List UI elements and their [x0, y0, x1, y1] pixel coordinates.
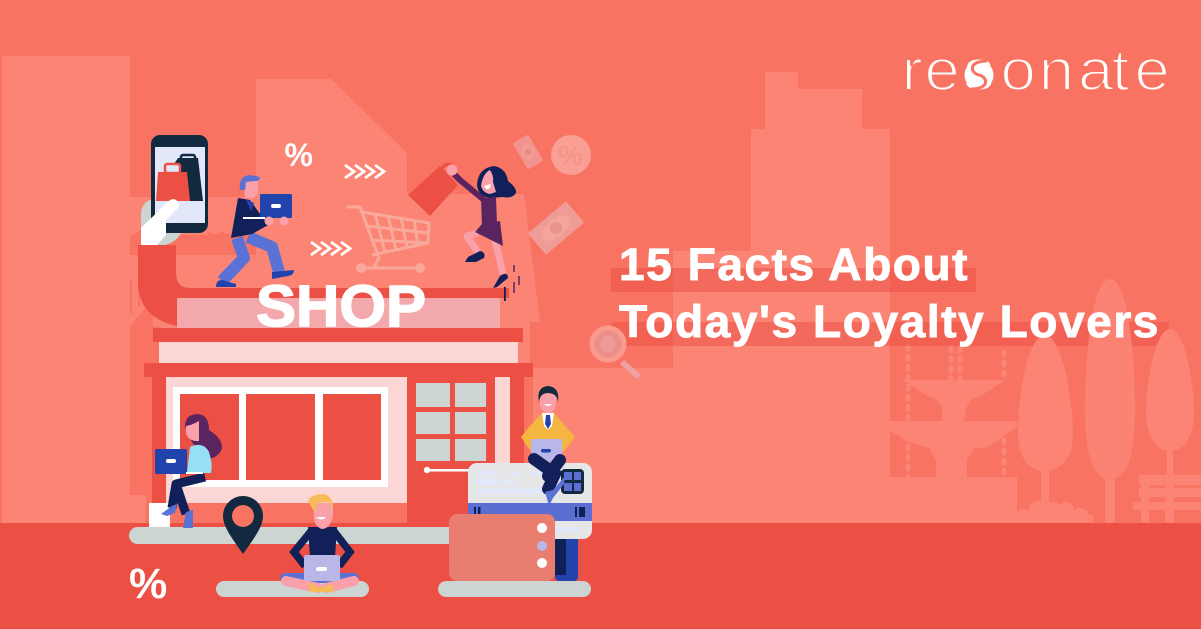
hair: [308, 494, 333, 513]
motion line: [504, 287, 506, 301]
icon: shopping cart: [347, 207, 429, 272]
sign text: SHOP: SHOP: [256, 274, 426, 339]
ground pills: [129, 527, 591, 597]
laptop: [531, 439, 562, 462]
shop: upper roof: [177, 288, 509, 298]
legs: [286, 581, 354, 588]
icon: location pin: [223, 496, 263, 554]
legs: [534, 459, 560, 489]
shop: door strip: [495, 377, 510, 472]
icon: phone with shopping bags: [151, 135, 208, 233]
icon: thumb: [141, 199, 179, 245]
icon: red bag: [156, 164, 190, 201]
title: Today's Loyalty Lovers: [619, 296, 1160, 347]
hair: [538, 386, 558, 402]
skirt: [475, 221, 503, 246]
icon: percent coin: %: [558, 140, 583, 171]
smile: [484, 184, 491, 189]
arrows upper: [345, 165, 384, 178]
icon: navy bag: [174, 155, 203, 201]
blue card stand: [555, 530, 578, 581]
hair: [477, 166, 516, 198]
icon: hand with sleeve: [138, 199, 190, 326]
torso: [231, 198, 270, 238]
ground: [0, 523, 1201, 629]
white box: [149, 503, 170, 528]
person: man in yellow sitting on card: [521, 386, 575, 506]
background: city silhouette: [2, 56, 1017, 523]
torso: [308, 527, 337, 558]
tie: [246, 199, 254, 212]
head: [243, 178, 258, 198]
person: woman on window ledge: [155, 414, 222, 528]
person: man with laptop on roof: [216, 175, 294, 287]
shop: facade panel: [166, 377, 407, 503]
title highlight bands: [611, 268, 1169, 346]
head: [540, 394, 556, 413]
percent sign bottom: %: [129, 560, 167, 608]
credit card: [468, 463, 592, 539]
icon: percent coin: [551, 135, 591, 175]
shop: body: [152, 377, 524, 523]
legs: [222, 237, 279, 281]
icon: small banknote: [513, 135, 543, 169]
title: 15 Facts About: [619, 239, 969, 290]
hands: [264, 216, 288, 226]
shoes: [465, 251, 508, 288]
card barcodes: [474, 507, 585, 517]
title: [619, 239, 1160, 347]
icon: red shopping bag held up: [408, 164, 458, 216]
laptop: [155, 449, 203, 474]
smile: [316, 517, 326, 520]
face: [186, 421, 199, 441]
shop building: [144, 288, 533, 523]
card stripe: [468, 503, 592, 521]
shop: lower roof: [144, 363, 533, 377]
torso: [481, 197, 497, 228]
background: trees, bushes and bench: [1016, 279, 1201, 526]
motion lines: [514, 265, 519, 293]
arrows lower: [311, 242, 350, 255]
feet: [307, 582, 333, 592]
background: fountain: [890, 346, 1017, 477]
shop: sign panel: [177, 298, 500, 328]
hair: [240, 175, 260, 190]
pink card with dots: [449, 514, 555, 581]
shop: middle roof: [153, 328, 523, 342]
shop: plinth: [166, 503, 407, 523]
hand: [446, 164, 458, 176]
background: awning shadow: [130, 229, 256, 350]
shop: door handle: [424, 467, 473, 473]
top: [187, 445, 212, 473]
smile: [544, 404, 552, 406]
icon: large banknote: [528, 201, 584, 255]
shoes: [161, 504, 193, 528]
icon: magnifying glass: [592, 328, 639, 377]
arm: [454, 174, 484, 200]
legs: [172, 477, 205, 514]
arms: [294, 530, 350, 566]
card chip: [561, 469, 584, 494]
person: blond man sitting cross-legged: [280, 494, 359, 592]
percent sign top: %: [284, 137, 313, 173]
legs: [467, 233, 503, 274]
laptop: [243, 194, 292, 219]
torso and arms: [521, 414, 575, 455]
hair: [185, 414, 222, 460]
face: [481, 170, 496, 194]
shop: window: [173, 387, 388, 487]
card text lines: [475, 471, 578, 532]
laptop: [304, 555, 340, 581]
person: jumping woman: [446, 164, 519, 293]
trousers: [280, 573, 359, 583]
tie: [545, 415, 551, 429]
shoes: [216, 270, 294, 287]
shop: frieze: [159, 342, 518, 363]
head: [313, 503, 333, 529]
shoe: [545, 476, 565, 506]
shop: door glass: [416, 383, 486, 461]
shirt: [542, 413, 554, 430]
logo: resonate: resonate: [902, 38, 1170, 102]
